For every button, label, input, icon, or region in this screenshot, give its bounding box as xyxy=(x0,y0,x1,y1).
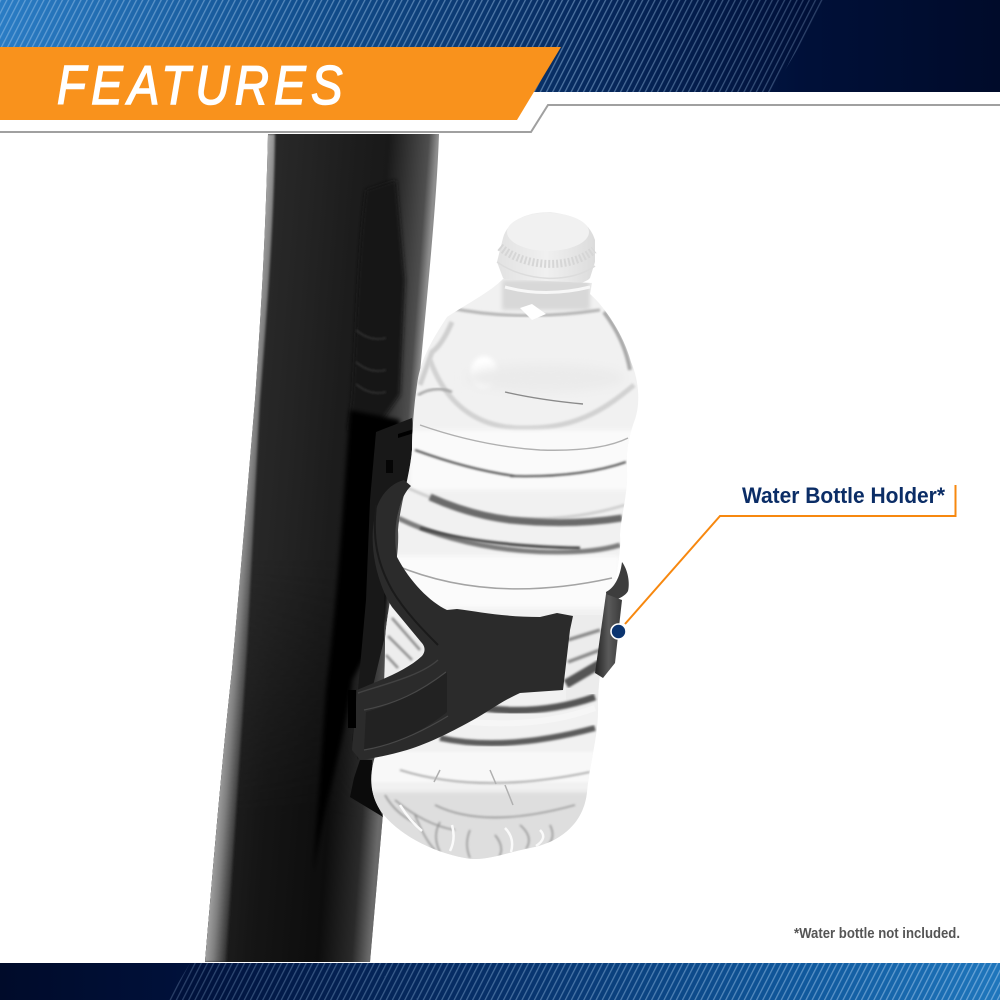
header divider line xyxy=(0,105,1000,132)
footer banner xyxy=(0,963,1000,1000)
title: FEATURES xyxy=(57,55,343,116)
callout label: Water Bottle Holder* xyxy=(742,483,945,508)
callout: water bottle holder xyxy=(611,483,956,639)
orange title ribbon xyxy=(0,47,561,120)
bottle body xyxy=(360,275,650,867)
bottle holder cradle xyxy=(348,480,573,760)
holder mount bracket xyxy=(350,418,416,817)
footnote: *Water bottle not included. xyxy=(794,926,960,942)
bottle holder right clip xyxy=(595,562,629,678)
water bottle xyxy=(360,212,650,867)
header banner xyxy=(0,0,1000,92)
exercise bike pole xyxy=(205,134,439,962)
callout leader line xyxy=(625,485,956,624)
callout dot xyxy=(611,624,626,639)
bottle cap xyxy=(497,212,595,287)
